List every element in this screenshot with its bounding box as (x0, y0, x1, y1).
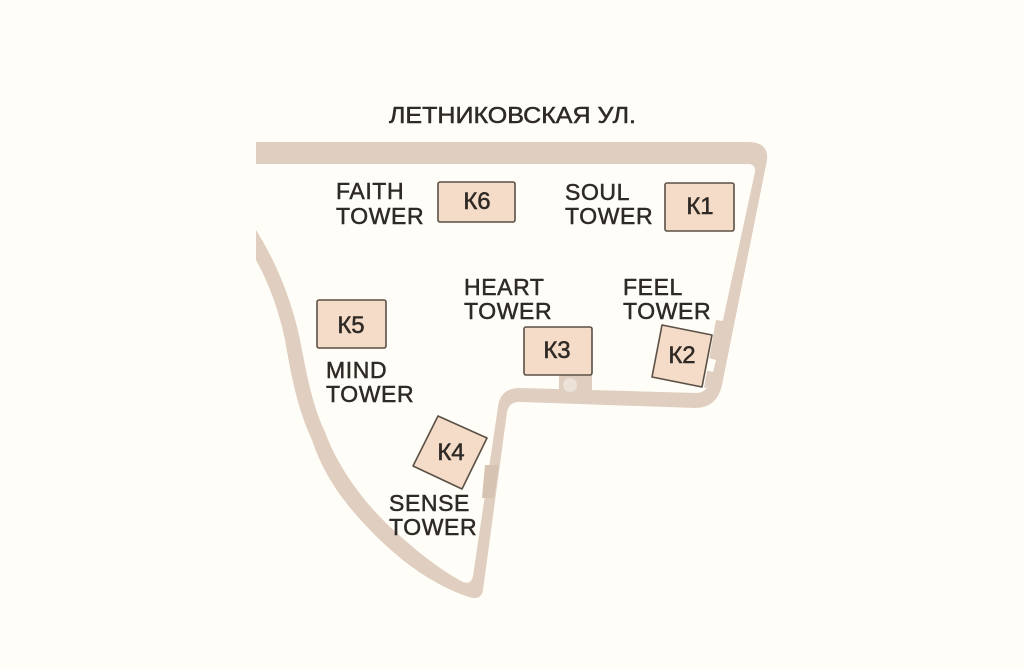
Soul Tower name: SOUL (565, 179, 630, 205)
K2 entrance connector (704, 320, 730, 388)
Feel Tower name: TOWER (623, 298, 711, 324)
K6 footprint (438, 182, 515, 222)
K4 label: К4 (437, 439, 465, 466)
K5 footprint (317, 300, 386, 348)
Soul Tower name: TOWER (565, 203, 653, 229)
building K5: Mind Tower (317, 300, 414, 407)
building K3: Heart Tower (464, 274, 592, 375)
K3 entrance connector (559, 375, 592, 394)
K4 footprint (413, 416, 487, 489)
Faith Tower name: FAITH (336, 178, 404, 204)
K5 label: К5 (337, 312, 365, 339)
Mind Tower name: TOWER (326, 381, 414, 407)
K2 label: К2 (668, 342, 696, 369)
site boundary road (256, 142, 767, 598)
building K6: Faith Tower (336, 178, 515, 229)
building K2: Feel Tower (623, 274, 712, 387)
Faith Tower name: TOWER (336, 203, 424, 229)
K2 footprint (652, 325, 712, 387)
Mind Tower name: MIND (326, 357, 387, 383)
Heart Tower name: HEART (464, 274, 545, 300)
K1 footprint (665, 183, 734, 231)
building K1: Soul Tower (565, 179, 734, 231)
building K4: Sense Tower (389, 416, 487, 540)
K4 entrance connector (482, 465, 499, 498)
Sense Tower name: SENSE (389, 490, 470, 516)
K6 label: К6 (463, 188, 491, 215)
K3 label: К3 (543, 337, 571, 364)
K2 entrance gap (705, 358, 716, 372)
Heart Tower name: TOWER (464, 298, 552, 324)
Sense Tower name: TOWER (389, 514, 477, 540)
K3 entrance circle (563, 378, 577, 392)
K3 footprint (524, 327, 592, 375)
K1 label: К1 (686, 193, 714, 220)
Feel Tower name: FEEL (623, 274, 683, 300)
street name heading: ЛЕТНИКОВСКАЯ УЛ. (389, 102, 636, 128)
